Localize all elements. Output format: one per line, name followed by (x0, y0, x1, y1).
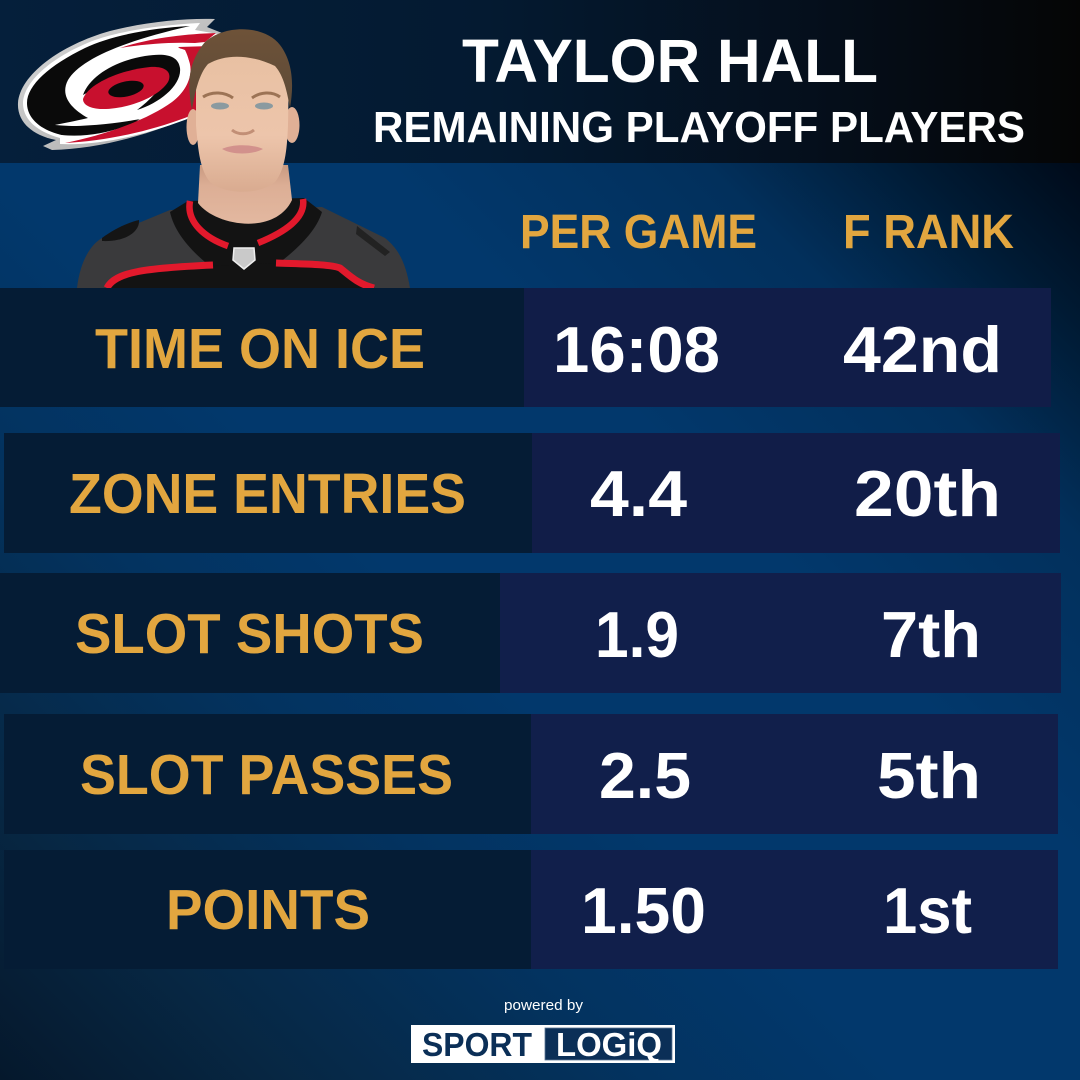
powered by label: powered by (504, 998, 584, 1014)
title: TAYLOR HALL (462, 27, 878, 95)
row: slot shots (0, 573, 1061, 693)
subtitle: REMAINING PLAYOFF PLAYERS (373, 103, 1025, 152)
nose and mouth (222, 130, 263, 154)
row: zone entries: ZONE ENTRIES (69, 462, 466, 526)
row: points: 1st (883, 874, 972, 947)
shoulder patches (102, 220, 139, 241)
row: slot shots: SLOT SHOTS (75, 602, 424, 666)
row: slot shots: 7th (881, 598, 981, 671)
ears (186, 109, 200, 145)
face (196, 51, 289, 192)
row: time on ice: 42nd (843, 313, 1002, 386)
jersey lower band (110, 263, 375, 288)
NHL crest (233, 248, 255, 269)
column heading: forward rank: F RANK (843, 206, 1014, 259)
Sportlogiq logo: SPORT (422, 1026, 532, 1063)
row: slot passes: 5th (877, 739, 981, 812)
row: points: POINTS (166, 878, 370, 942)
eyes (203, 93, 280, 110)
header band (0, 0, 1080, 163)
column heading: per game: PER GAME (520, 206, 757, 259)
icon: Carolina Hurricanes logo (18, 19, 222, 150)
row: zone entries: 20th (854, 457, 1001, 530)
row: time on ice: 16:08 (553, 313, 720, 386)
jersey (77, 207, 410, 288)
row: time on ice (0, 288, 1051, 407)
red collar trim (189, 199, 303, 246)
row: zone entries: 4.4 (590, 457, 687, 530)
row: points: 1.50 (581, 874, 706, 947)
row: slot passes: SLOT PASSES (80, 743, 453, 807)
jersey chest stripes (107, 263, 374, 288)
neck (198, 165, 292, 224)
row: slot shots: 1.9 (595, 598, 679, 671)
row: zone entries (4, 433, 1060, 553)
row: slot passes: 2.5 (599, 739, 691, 812)
row: slot passes (4, 714, 1058, 834)
player photo (77, 29, 410, 288)
Sportlogiq logo: LOGiQ (556, 1026, 662, 1063)
row: points (4, 850, 1058, 969)
jersey collar (170, 198, 322, 270)
Sportlogiq logo (411, 1025, 675, 1063)
hair (189, 29, 292, 110)
row: time on ice: TIME ON ICE (95, 317, 425, 381)
